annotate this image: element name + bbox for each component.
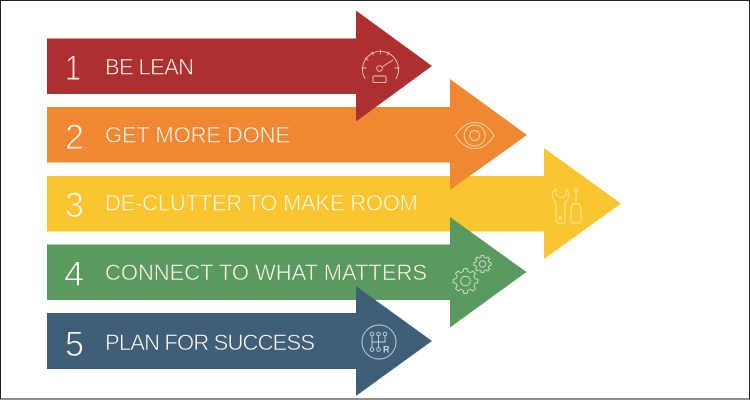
arrow 4: connect to what matters [47, 217, 526, 328]
number 2: 2 [65, 118, 84, 157]
label 2: GET MORE DONE [105, 122, 290, 148]
icon: gear shifter: R [383, 344, 390, 354]
arrow 5: plan for success [47, 286, 432, 396]
label 1: BE LEAN [105, 54, 194, 80]
number 1: 1 [65, 49, 81, 88]
arrow 1: be lean [47, 10, 432, 122]
icon: eye [456, 122, 494, 149]
label 5: PLAN FOR SUCCESS [105, 330, 315, 355]
label 4: CONNECT TO WHAT MATTERS [105, 260, 427, 285]
arrow 2: get more done [47, 79, 527, 190]
icon: gear shifter [362, 325, 396, 359]
number 5: 5 [65, 325, 84, 364]
number 3: 3 [65, 186, 84, 225]
icon: wrench and screwdriver [552, 188, 581, 223]
icon: gears [453, 255, 491, 293]
arrow 3: de-clutter to make room [47, 148, 621, 259]
number 4: 4 [64, 255, 84, 294]
icon: speedometer [362, 50, 399, 82]
label 3: DE-CLUTTER TO MAKE ROOM [105, 190, 418, 216]
